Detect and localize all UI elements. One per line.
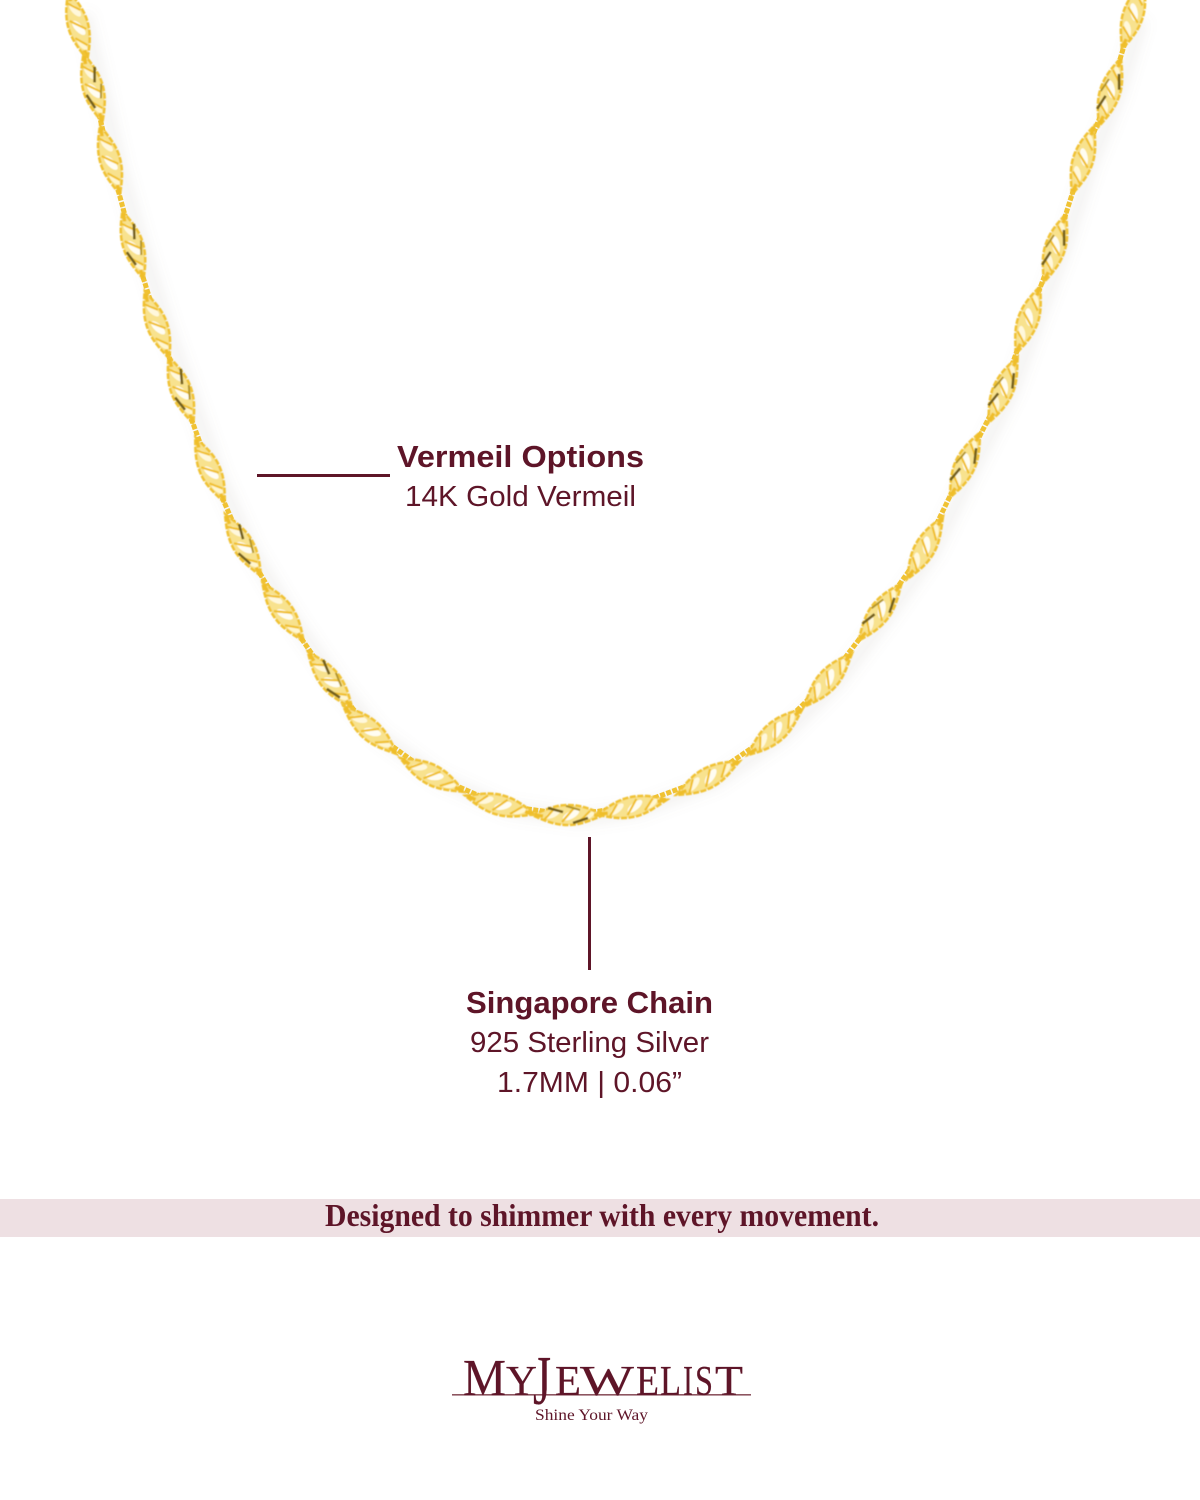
tagline band [0, 1197, 1200, 1237]
logo: MyJewelist [452, 1343, 751, 1424]
logo: MyJewelist: L [660, 1359, 681, 1405]
logo: MyJewelist: M [463, 1350, 506, 1407]
callout line: vermeil [257, 474, 390, 477]
necklace chain [59, 0, 1154, 825]
logo: MyJewelist: S [695, 1359, 713, 1405]
callout: singapore chain [466, 985, 713, 1099]
callout: singapore chain: Singapore Chain [466, 985, 713, 1020]
tagline band: Designed to shimmer with every movement. [325, 1197, 879, 1233]
callout: vermeil options [397, 439, 644, 513]
logo: MyJewelist: E [636, 1359, 659, 1405]
logo: MyJewelist: W [580, 1359, 634, 1405]
logo: MyJewelist: T [715, 1359, 743, 1405]
logo: MyJewelist: E [555, 1359, 581, 1405]
callout: singapore chain: 1.7MM | 0.06” [497, 1067, 682, 1099]
callout: singapore chain: 925 Sterling Silver [470, 1027, 709, 1059]
callout: vermeil options: Vermeil Options [397, 439, 644, 474]
callout: vermeil options: 14K Gold Vermeil [405, 481, 636, 513]
logo: MyJewelist: Shine Your Way [535, 1407, 648, 1424]
logo: MyJewelist: Y [506, 1359, 537, 1405]
callout line: chain [588, 837, 591, 970]
logo: MyJewelist: I [683, 1359, 693, 1405]
logo: MyJewelist: J [533, 1343, 551, 1420]
